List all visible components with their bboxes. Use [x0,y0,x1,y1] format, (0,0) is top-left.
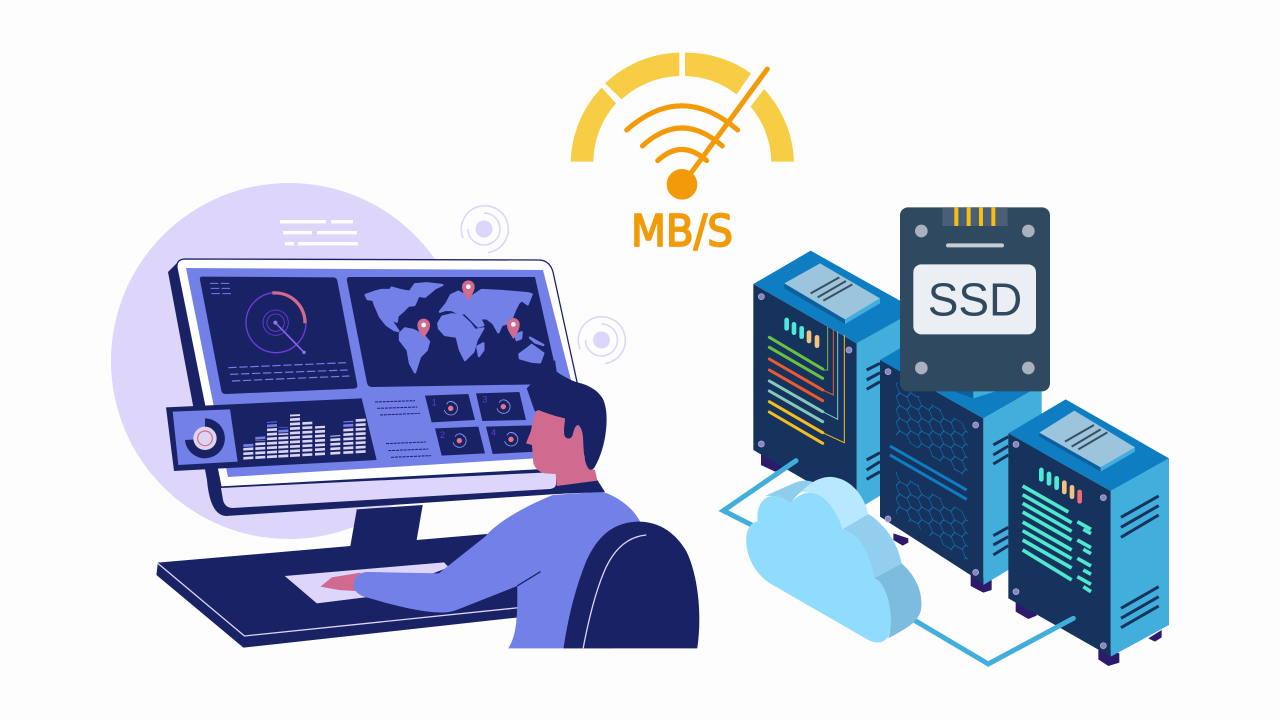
server 2 vents [993,437,1008,555]
speed label: MB/S [631,206,733,257]
tile 2 [435,427,485,456]
SSD label plate [913,264,1036,334]
server 3 screws [1013,441,1106,649]
background circle [111,183,467,539]
face [526,410,597,486]
server 1 lid [784,283,845,324]
paper on desk [285,562,449,603]
tile 1: 1 [432,397,437,407]
tile 3 [476,392,526,421]
server 3 lid [1039,433,1101,472]
server 2 hex mesh upper [896,382,968,478]
radar target rings [263,310,288,335]
panel: bar chart and donut [166,398,377,471]
collar [553,480,605,494]
cloud [746,477,921,642]
world map continents [366,280,543,372]
donut tile [173,409,238,465]
server 1 screws [758,294,852,447]
wifi arcs [627,106,738,161]
cable right [908,617,1073,664]
server 1 [753,251,917,510]
screen [186,268,590,477]
server 2 hex mesh lower [896,472,968,562]
person: head [526,360,607,494]
torso [354,492,649,648]
monitor white frame [177,259,592,487]
chair [564,522,699,648]
signal ring icon right [578,317,625,364]
tile 3: 3 [482,395,487,405]
server 2 stripes [890,446,967,499]
cloud middle side [842,514,902,578]
hand [320,573,364,592]
server 1 vents [867,363,880,479]
panel: radar [200,277,357,394]
gauge hub [667,169,697,200]
cloud front [746,493,891,642]
radar needle [273,321,306,354]
donut chart [185,418,225,458]
map pin north [462,280,475,301]
server 2 lid peek [950,390,973,398]
arm crease [517,572,540,586]
SSD slot [946,243,1004,247]
tile 4 [486,425,537,454]
gauge segments [571,53,794,162]
cable left [723,461,796,525]
monitor back shell [168,263,602,516]
server 3 vents [1121,496,1159,628]
SSD label text: SSD [928,273,1022,325]
map pin south america [417,319,430,338]
monitor chin [221,472,556,508]
data lines [228,363,349,381]
monitor [168,259,602,516]
SSD body [900,207,1050,391]
floating white text lines [280,220,358,245]
desk edge highlight [158,563,519,636]
hair [527,360,607,470]
tile 1 [425,394,475,422]
person: body and arm [320,492,699,648]
SSD connector [942,207,1008,226]
server 2 [880,327,1042,593]
menu lines [210,283,231,294]
SSD drive [900,207,1050,391]
panel: world map [347,277,559,387]
radar pink arc [272,293,305,323]
server 3 [1008,399,1169,666]
signal ring icon top [461,206,508,252]
server 1 traces [823,327,844,443]
radar circle [246,293,306,353]
tile 2: 2 [440,430,445,440]
panel: small dashboards [375,392,537,457]
server 2 screws [885,369,979,575]
server 1 leds [787,320,817,346]
server 3 teal lines [1023,486,1091,592]
equalizer bars [248,411,361,459]
map pin asia [507,318,520,339]
cloud top lobe [802,477,868,529]
gauge needle [688,69,767,177]
desk and monitor stand [156,505,519,648]
server 3 leds [1041,470,1080,501]
SSD screws [915,225,1035,374]
gauge [571,53,794,200]
chair highlight [583,535,646,648]
text dashes [375,401,431,457]
SSD gold pins [954,207,995,226]
tile 4: 4 [491,428,496,438]
cloud lower side [874,563,921,638]
servers [723,251,1169,666]
cloud back lobe [765,481,815,504]
server 1 colour lines [769,337,823,443]
